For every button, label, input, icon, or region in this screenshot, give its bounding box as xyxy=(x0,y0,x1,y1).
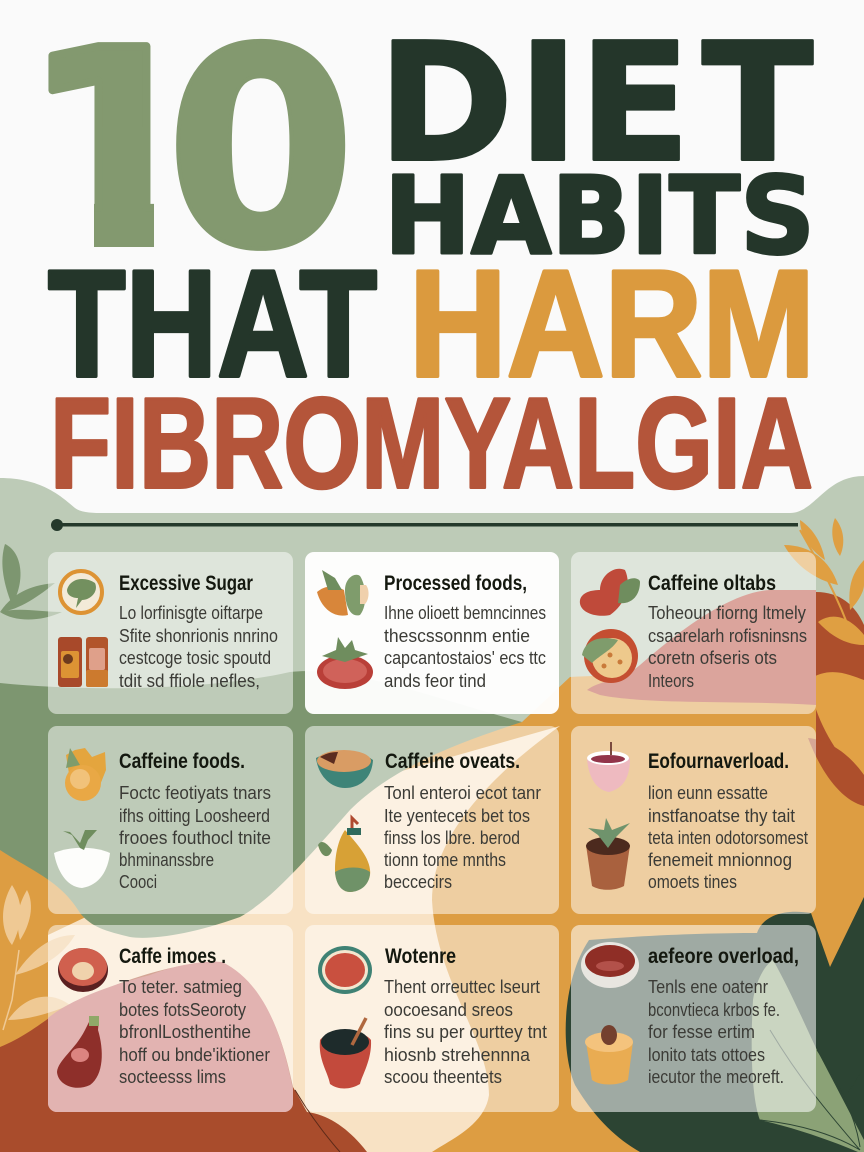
panel: excessive sugar xyxy=(48,552,293,714)
icon: oil bottle xyxy=(318,818,370,892)
panel: processed foods xyxy=(305,552,559,714)
body text: tionn tome mnths xyxy=(384,850,506,870)
body text: Ihne olioett bemncinnes xyxy=(384,603,546,623)
body text: Tonl enteroi ecot tanr xyxy=(384,783,541,803)
body text: beccecirs xyxy=(384,872,452,892)
title xyxy=(48,38,814,490)
icon: red sauce bowl xyxy=(581,942,639,988)
panel: caffeine foods xyxy=(48,726,293,914)
body text: hoff ou bnde'iktioner xyxy=(119,1045,270,1065)
panel: eofournaverload xyxy=(571,726,816,914)
body text: teta inten odotorsomest xyxy=(648,828,808,848)
body text: thescssonnm entie xyxy=(384,626,530,646)
body text: cestcoge tosic spoutd xyxy=(119,648,271,668)
decorative orange sprig xyxy=(784,518,864,645)
icon: sauce bottle xyxy=(57,1016,102,1088)
heading: Eofournaverload. xyxy=(648,750,789,773)
heading: Wotenre xyxy=(385,945,456,968)
body text: ifhs oitting Loosheerd xyxy=(119,806,270,826)
body text: bfronlLosthentihe xyxy=(119,1022,251,1042)
heading: Processed foods, xyxy=(384,572,527,595)
pink overlay xyxy=(48,962,293,1112)
heading: Excessive Sugar xyxy=(119,572,253,595)
body text: ands feor tind xyxy=(384,671,486,691)
body text: iecutor the meoreft. xyxy=(648,1067,784,1087)
panel: caffeine oltabs xyxy=(571,552,816,714)
body text: csaarelarh rofisninsns xyxy=(648,626,807,646)
body text: fenemeit mnionnog xyxy=(648,850,792,870)
icon: donut plate xyxy=(58,948,108,992)
icon: potted plant xyxy=(586,818,630,890)
title: HABITS: HABITS xyxy=(384,155,815,279)
body text xyxy=(384,783,541,892)
body text: Sfite shonrionis nnrino xyxy=(119,626,278,646)
body text: Toheoun fiorng ltmely xyxy=(648,603,806,623)
body text xyxy=(384,603,546,691)
body text: bconvtieca krbos fe. xyxy=(648,1000,780,1020)
body text: instfanoatse thy tait xyxy=(648,806,795,826)
decorative pale leaves xyxy=(3,885,75,1030)
icon: pizza xyxy=(582,629,638,683)
panel: caffe imoes xyxy=(48,925,293,1112)
title: THAT: THAT xyxy=(48,239,377,409)
body text xyxy=(119,603,278,691)
body text: capcantostaios' ecs ttc xyxy=(384,648,546,668)
body text: for fesse ertim xyxy=(648,1022,755,1042)
panel: caffeine oveats xyxy=(305,726,559,914)
heading: Caffeine oltabs xyxy=(648,572,776,595)
icon: teal soup bowl xyxy=(318,946,372,994)
body text xyxy=(119,977,270,1087)
title: DIET: DIET xyxy=(378,10,813,198)
body text: oocoesand sreos xyxy=(384,1000,513,1020)
body text xyxy=(648,977,784,1087)
icon: citrus fruit xyxy=(65,748,106,801)
body text: frooes fouthocl tnite xyxy=(119,828,271,848)
body text xyxy=(384,977,547,1087)
panel: aefeore overload xyxy=(571,925,816,1112)
icon: yellow cup xyxy=(585,1025,633,1084)
body text xyxy=(119,783,271,892)
icon: red flowers xyxy=(580,569,640,616)
body text: botes fotsSeoroty xyxy=(119,1000,246,1020)
body text: Cooci xyxy=(119,872,157,892)
title: number 10 xyxy=(48,38,346,251)
heading: aefeore overload, xyxy=(648,945,799,968)
heading: Caffe imoes . xyxy=(119,945,226,968)
icon: tomato slice xyxy=(317,637,373,689)
body text xyxy=(648,783,808,892)
body text xyxy=(648,603,807,691)
body text: omoets tines xyxy=(648,872,737,892)
divider line xyxy=(51,519,798,531)
icon: pink cup xyxy=(587,742,630,792)
decorative left leaf sprig xyxy=(0,544,62,620)
body text: To teter. satmieg xyxy=(119,977,242,997)
icon: plate of greens xyxy=(60,571,102,613)
body text: Lo lorfinisgte oiftarpe xyxy=(119,603,263,623)
body text: Inteors xyxy=(648,671,694,691)
title: number 10: 1 xyxy=(22,0,210,307)
title: HARM: HARM xyxy=(409,239,815,409)
body text: scoou theentets xyxy=(384,1067,502,1087)
icon: sauce jars xyxy=(58,637,108,687)
body text: coretn ofseris ots xyxy=(648,648,777,668)
pink overlay xyxy=(587,590,816,705)
icon: white bowl plant xyxy=(54,830,110,888)
body text: Ite yentecets bet tos xyxy=(384,806,530,826)
body text: bhminanssbre xyxy=(119,850,214,870)
body text: Foctc feotiyats tnars xyxy=(119,783,271,803)
body text: lonito tats ottoes xyxy=(648,1045,765,1065)
body text: hiosnb strehennna xyxy=(384,1045,531,1065)
heading: Caffeine oveats. xyxy=(385,750,520,773)
heading: Caffeine foods. xyxy=(119,750,245,773)
panel: wotenre xyxy=(305,925,559,1112)
icon: soup bowl xyxy=(316,750,373,788)
body text: socteesss lims xyxy=(119,1067,226,1087)
body text: fins su per ourttey tnt xyxy=(384,1022,547,1042)
body text: tdit sd ffiole nefles, xyxy=(119,671,260,691)
icon: red cup with spoon xyxy=(320,1018,371,1088)
body text: Tenls ene oatenr xyxy=(648,977,768,997)
icon: vegetables xyxy=(317,570,369,616)
body text: lion eunn essatte xyxy=(648,783,768,803)
body text: finss los lbre. berod xyxy=(384,828,520,848)
body text: Thent orreuttec lseurt xyxy=(384,977,540,997)
